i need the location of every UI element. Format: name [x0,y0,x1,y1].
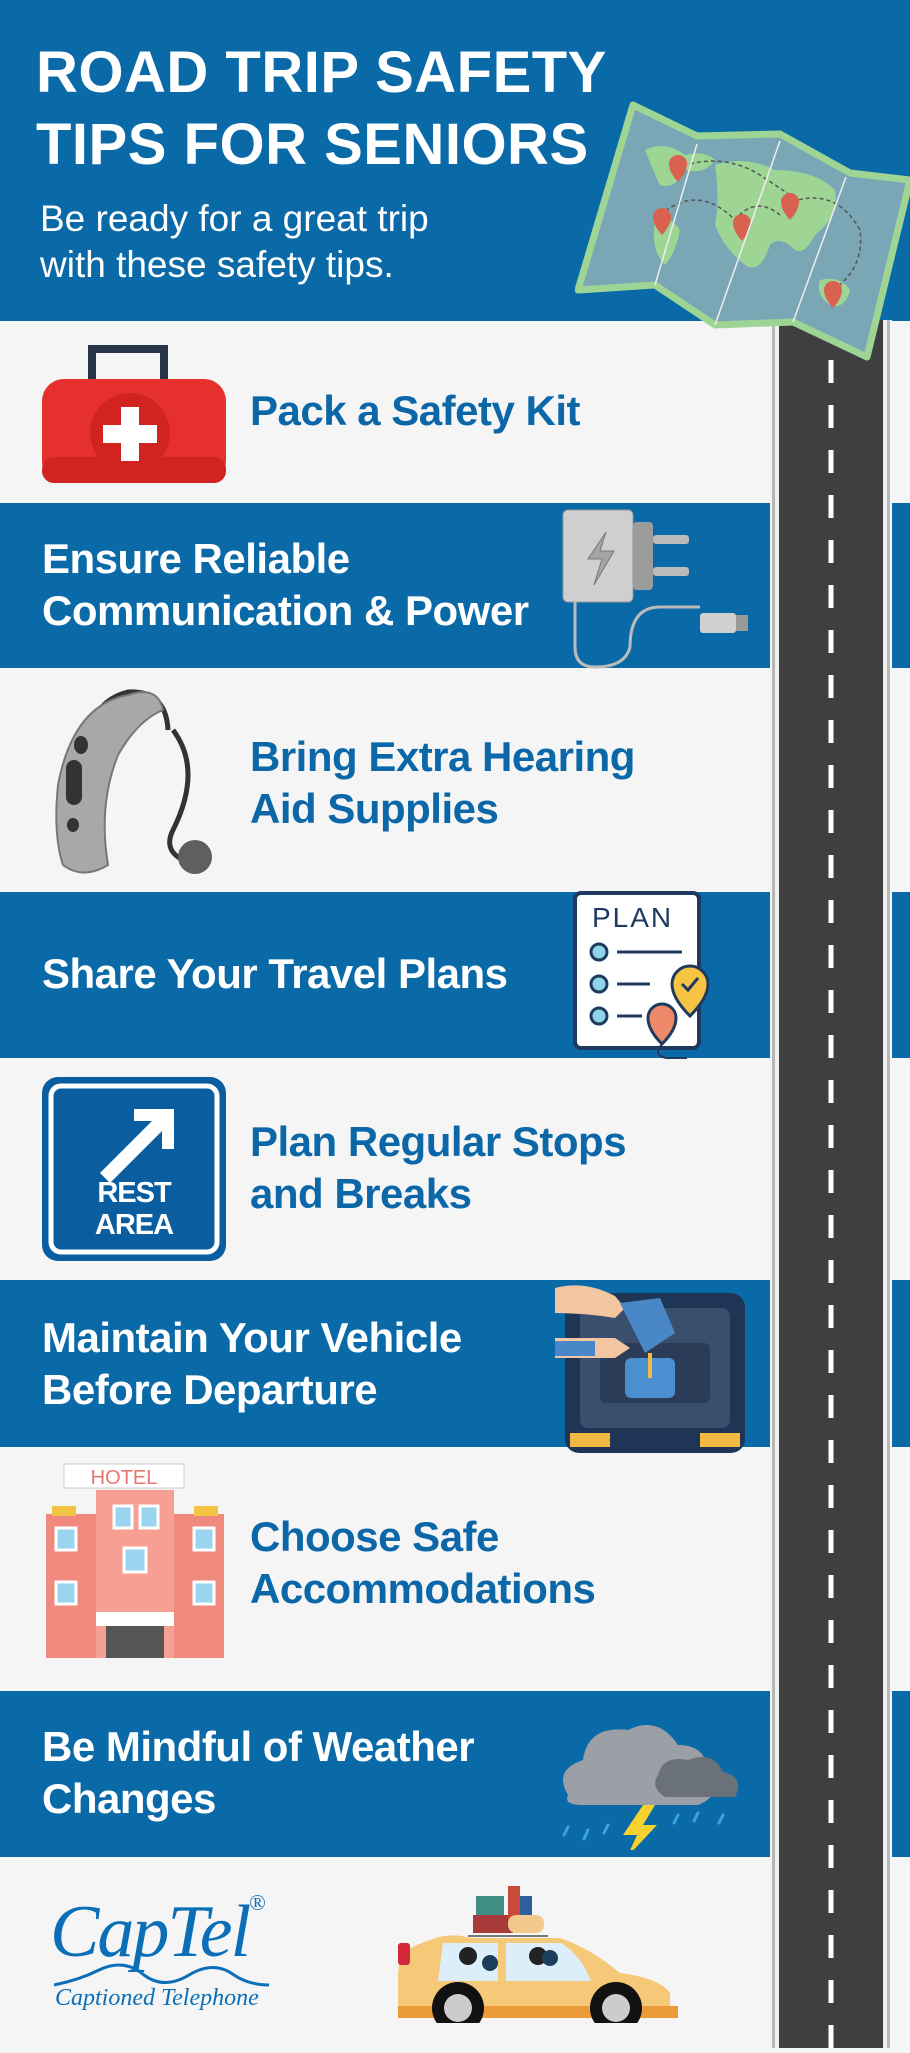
heading: regular stops [250,1118,626,1217]
heading: communication & power: Communication & Power [42,587,529,634]
header [0,0,910,321]
icon: rest area sign [42,1077,226,1261]
icon: rest area sign: AREA [95,1209,174,1241]
icon: charger [562,510,748,668]
heading: regular stops: and Breaks [250,1170,471,1217]
heading: weather: Changes [42,1775,216,1822]
heading: communication & power: Ensure Reliable [42,535,350,582]
heading: share travel plans: Share Your Travel Plans [42,950,508,997]
heading: communication & power [42,535,529,634]
road [770,320,892,2048]
heading: safe accommodations: Accommodations [250,1565,595,1612]
blue bands [0,503,910,668]
logo: CapTel: CapTel® [50,1890,264,1973]
subtitle [40,198,429,285]
logo: CapTel: Captioned Telephone [55,1985,259,2011]
subtitle: with these safety tips. [40,244,394,285]
icon: plan document: PLAN [592,902,673,933]
icon: rest area sign: REST [97,1177,172,1209]
title: TIPS FOR SENIORS [36,112,589,177]
heading: weather [42,1723,474,1822]
heading: hearing aid supplies: Bring Extra Hearing [250,733,635,780]
icon: first aid kit [42,345,226,483]
subtitle: Be ready for a great trip [40,198,429,239]
title: ROAD TRIP SAFETY [36,40,607,105]
heading: hearing aid supplies: Aid Supplies [250,785,498,832]
heading: maintain vehicle [42,1314,462,1413]
icon: car with travellers [398,1886,678,2023]
heading: maintain vehicle: Before Departure [42,1366,377,1413]
heading: hearing aid supplies [250,733,635,832]
logo: CapTel [50,1890,269,2011]
title [36,40,607,177]
icon: hotel [46,1464,224,1658]
icon: map [575,102,910,360]
icon: hearing aid [55,689,212,874]
heading: maintain vehicle: Maintain Your Vehicle [42,1314,462,1361]
icon: engine maintenance [555,1285,745,1453]
icon: storm cloud [562,1725,738,1850]
icon: hotel: HOTEL [91,1467,157,1489]
icon: plan document [573,891,710,1059]
heading: regular stops: Plan Regular Stops [250,1118,626,1165]
heading: safe accommodations [250,1513,595,1612]
heading: safe accommodations: Choose Safe [250,1513,499,1560]
heading: weather: Be Mindful of Weather [42,1723,474,1770]
heading: pack a safety kit: Pack a Safety Kit [250,387,580,434]
